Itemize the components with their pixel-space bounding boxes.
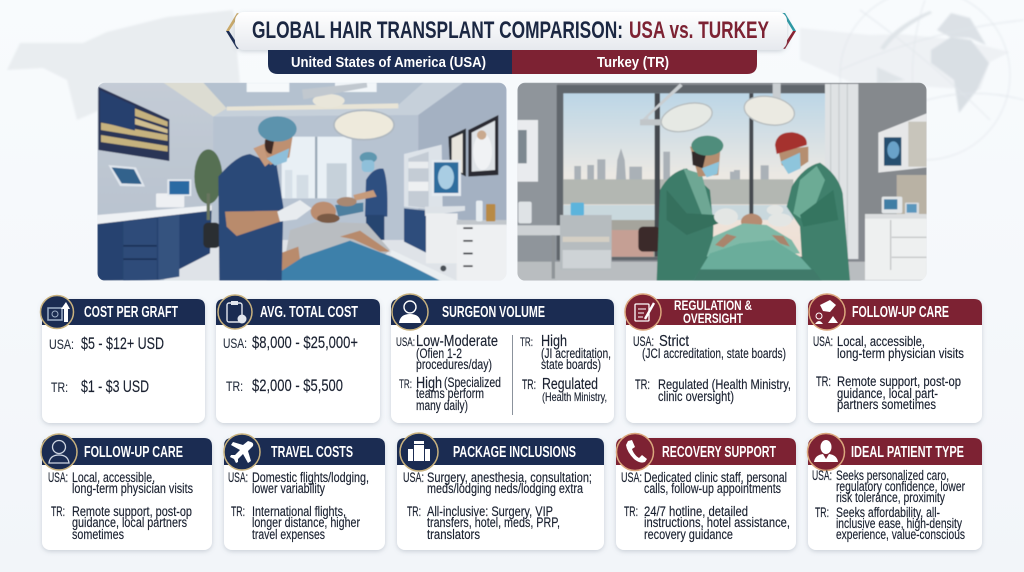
TR row: TR: [815,505,829,520]
USA row: USA: [48,470,68,485]
USA column: (Specialized [444,375,501,390]
TR row: experience, value-conscious [836,527,965,542]
Turkey label: Turkey (TR) [597,54,669,71]
panel: follow-up care (top) [808,294,982,423]
TR row [407,504,560,542]
lamps [313,94,345,107]
panel: cost per graft [40,296,205,423]
background world map and globe [7,0,1024,160]
heading: COST PER GRAFT [84,304,178,321]
USA row: long-term physician visits [72,481,193,496]
right cabinets [878,113,927,173]
header bar [397,438,604,465]
USA row: Surgery, anesthesia, consultation; [427,470,592,485]
TR row: Regulated (Health Ministry, [658,376,791,392]
TR row: partners sometimes [837,397,936,412]
TR row: travel expenses [252,527,325,542]
USA row: $5 - $12+ USD [81,335,164,353]
TR row: recovery guidance [644,527,733,542]
USA label: United States of America (USA) [291,54,486,71]
USA row: Strict [659,333,689,350]
country legend bar [268,50,757,74]
chair [203,223,220,248]
panel: package inclusions [397,433,604,550]
TR column: state boards) [541,357,601,372]
icon: physician [41,434,77,470]
heading: SURGEON VOLUME [442,304,545,321]
USA row: lower variability [252,481,325,496]
USA row: risk tolerance, proximity [836,490,945,505]
USA row [48,470,193,496]
TR row: longer distance, higher [252,515,360,530]
TR column: High [541,333,567,350]
TR row: translators [427,527,480,542]
USA column [396,333,501,413]
panel: recovery support [616,434,796,550]
USA row: regulatory confidence, lower [836,479,965,494]
icon: patient [808,434,844,470]
heading: REGULATION & [674,298,752,313]
heading: FOLLOW-UP CARE [84,444,183,461]
icon: surgeon [392,294,428,330]
flag [98,87,169,161]
USA row [812,468,965,505]
lead surgeon [218,154,283,281]
panel: surgeon volume [391,294,614,423]
USA row: calls, follow-up appointments [644,481,781,496]
USA row: (JCI accreditation, state boards) [642,346,786,361]
patient [740,212,763,226]
TR row [815,505,965,542]
plant [194,149,222,204]
TR row: guidance, local partners [72,515,187,530]
TR row: TR: [635,377,650,392]
TR row: $1 - $3 USD [81,378,149,396]
TR row: clinic oversight) [658,389,734,404]
USA row: Dedicated clinic staff, personal [644,470,787,485]
left surgeon [657,168,713,281]
USA row: meds/lodging neds/lodging extra [427,481,583,496]
USA row: USA: [228,470,248,485]
TR row: 24/7 hotline, detailed [644,504,748,519]
header bar [808,438,982,465]
icon: care team [809,294,845,330]
header bar [42,438,212,465]
TR column [520,333,611,404]
TR row: All-inclusive: Surgery, VIP [427,504,553,519]
TR row: sometimes [72,527,124,542]
heading: FOLLOW-UP CARE [852,304,949,321]
header bar [616,438,796,465]
right shelving [404,145,443,211]
USA row: USA: [621,470,642,485]
photo: Turkey clinic [517,83,927,281]
icon: clipboard [218,295,252,329]
skyline [574,149,770,180]
heading: IDEAL PATIENT TYPE [851,444,964,461]
icon: telephone [616,434,654,470]
USA row: USA: [223,336,247,351]
left equipment [518,202,532,223]
header bar [224,438,385,465]
USA column: High [416,375,442,392]
TR row: inclusive ease, high-density [836,516,962,531]
TR row [816,374,961,412]
USA row [49,335,164,353]
icon: package [400,433,438,471]
TR row: TR: [51,504,65,519]
header bar [42,299,205,325]
panel: ideal patient type [808,434,982,550]
TR row: Remote support, post-op [837,374,961,389]
TR row: TR: [51,380,68,395]
USA row [403,470,592,496]
USA row: long-term physician visits [837,346,964,361]
TR row [231,504,360,542]
TR row: TR: [816,374,831,389]
left chevron [226,13,240,49]
header bar [808,299,982,325]
icon: checklist [625,294,661,330]
title accent text: USA vs. TURKEY [629,17,769,44]
TR column: TR: [520,335,533,349]
right chevron [782,13,796,49]
TR row: Seeks affordability, all- [836,505,940,520]
tablet and printer [108,165,145,187]
USA row [228,470,369,496]
TR row: TR: [231,504,245,519]
panel: travel costs [224,434,385,550]
TR row [51,504,192,542]
header bar [391,299,614,325]
USA column: procedures/day) [416,357,492,372]
TR column: (JI acreditation, [541,346,611,361]
USA row: $8,000 - $25,000+ [252,334,358,352]
USA column: USA: [396,335,415,349]
TR row: TR: [624,504,638,519]
icon: airplane [224,434,260,470]
panel: follow-up care (bottom) [41,434,212,550]
heading: PACKAGE INCLUSIONS [453,444,576,461]
USA row [813,334,964,361]
TR column: Regulated [542,376,598,393]
left counter [97,210,212,281]
TR row [226,377,343,395]
panel: regulation and oversight: OVERSIGHT [683,311,744,326]
TR row [624,504,790,542]
USA row: Local, accessible, [72,470,155,485]
icon: money and up arrow [40,296,74,328]
USA row: USA: [49,337,74,352]
TR row: Remote support, post-op [72,504,192,519]
TR row: guidance, local part- [837,386,938,401]
TR row: TR: [226,379,243,394]
TR row: transfers, hotel, meds, PRP, [427,515,560,530]
TR row: instructions, hotel assistance, [644,515,790,530]
USA column: (Ofien 1-2 [416,346,462,361]
heading: AVG. TOTAL COST [260,304,358,321]
assistant surgeon [360,152,377,163]
panel: average total cost [216,295,380,423]
TR row [51,378,149,396]
TR row: $2,000 - $5,500 [252,377,343,395]
USA row [621,470,787,496]
header bar [216,299,380,325]
USA row: Domestic flights/lodging, [252,470,369,485]
USA row: USA: [812,468,832,483]
USA row: Seeks personalized caro, [836,468,949,483]
USA column: TR: [399,377,412,391]
title text: GLOBAL HAIR TRANSPLANT COMPARISON: [252,17,623,44]
USA row: USA: [633,334,654,349]
USA row: Local, accessible, [837,334,925,349]
header bar [626,299,796,325]
lights [643,83,683,120]
heading: TRAVEL COSTS [271,444,353,461]
panel: regulation and oversight [625,294,796,423]
TR column: TR: [522,377,536,392]
TR row: TR: [407,504,421,519]
patient [286,222,390,259]
title banner [226,12,796,50]
USA column: Low-Moderate [416,333,498,350]
TR row [635,376,791,404]
USA row: USA: [403,470,424,485]
USA column: teams perform [416,386,484,401]
TR row: International flights, [252,504,346,519]
USA row [223,334,358,352]
heading: RECOVERY SUPPORT [662,444,776,461]
USA row: USA: [813,334,833,349]
USA row [633,333,786,361]
right surgeon [787,163,850,281]
photo: USA clinic [97,83,507,281]
USA column: many daily) [416,398,468,413]
TR column: (Health Ministry, [542,390,607,404]
